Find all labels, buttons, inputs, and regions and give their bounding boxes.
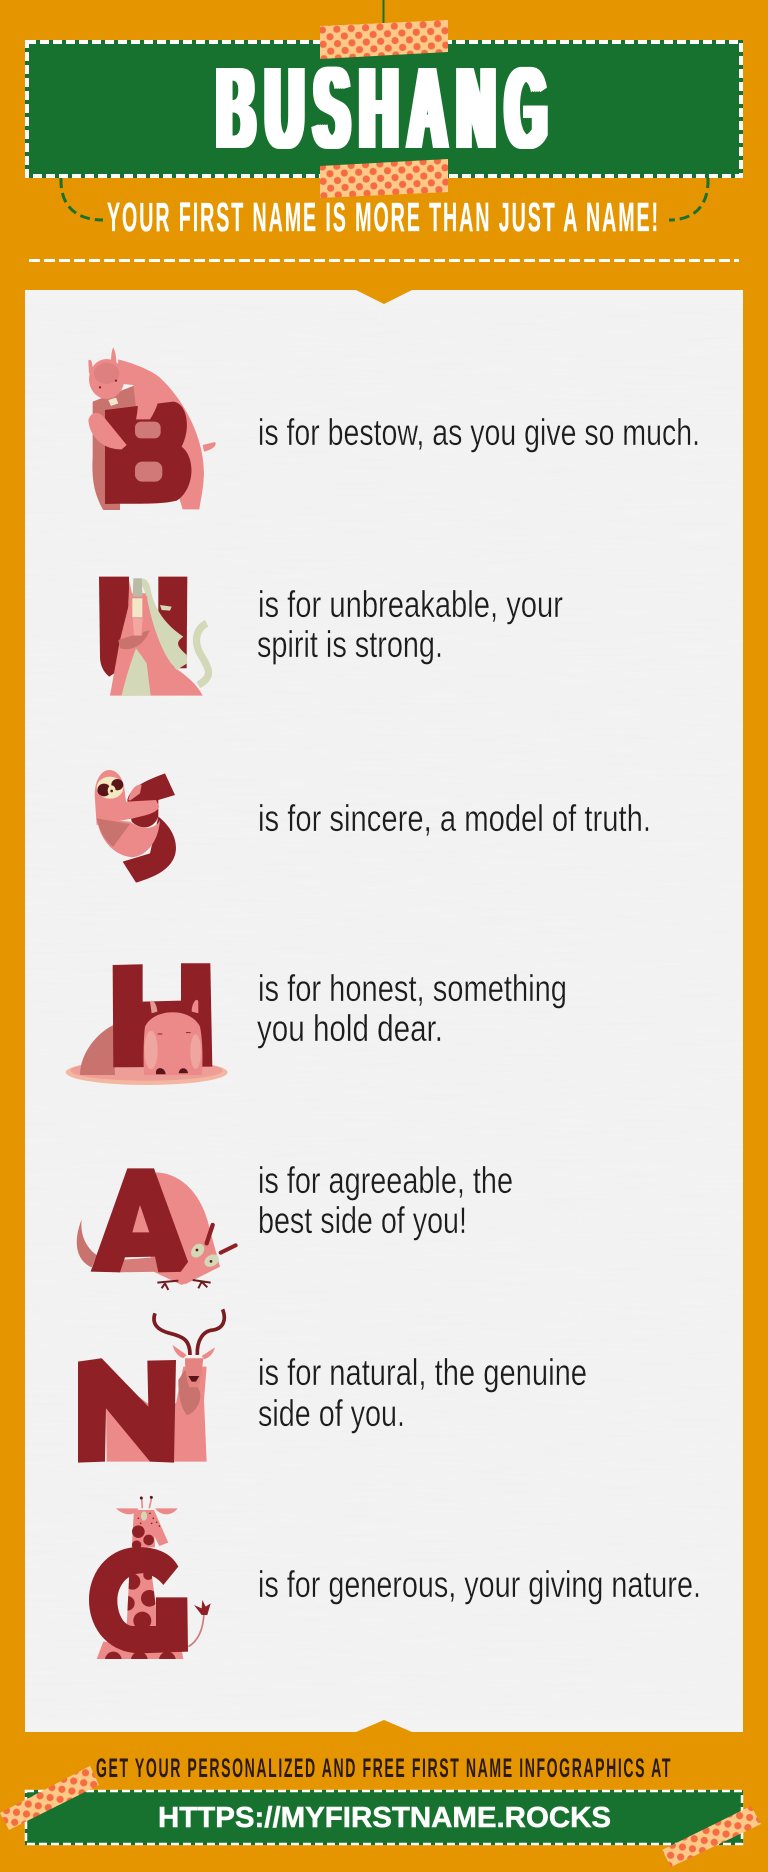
letter G illustration bbox=[89, 1496, 211, 1668]
title: BUSHANG bbox=[217, 43, 557, 173]
text: U: is for unbreakable, your bbox=[258, 584, 563, 625]
letter B illustration bbox=[88, 347, 216, 510]
text: A: is for agreeable, the bbox=[258, 1160, 513, 1201]
tape: footer right bbox=[662, 1806, 761, 1867]
hanging thread bbox=[382, 0, 384, 24]
tape: banner bottom bbox=[320, 159, 448, 198]
letter U illustration bbox=[99, 577, 209, 696]
tape: banner top bbox=[320, 20, 448, 59]
footer URL: HTTPS://MYFIRSTNAME.ROCKS bbox=[158, 1802, 611, 1834]
letter N illustration bbox=[78, 1309, 224, 1463]
text: U line 2: spirit is strong. bbox=[257, 624, 443, 665]
text: N: is for natural, the genuine bbox=[258, 1352, 587, 1393]
text: N line 2: side of you. bbox=[258, 1393, 405, 1434]
tape: footer left bbox=[0, 1766, 99, 1830]
divider bbox=[29, 259, 739, 262]
letter A illustration bbox=[77, 1168, 236, 1290]
text: H line 2: you hold dear. bbox=[257, 1008, 443, 1049]
subtitle connector left bbox=[61, 178, 103, 220]
panel: letters bbox=[25, 290, 743, 1732]
subtitle connector right bbox=[669, 178, 708, 220]
footer banner bbox=[25, 1790, 743, 1845]
letter H illustration bbox=[66, 963, 228, 1085]
letter S illustration bbox=[95, 770, 176, 883]
text: H: is for honest, something bbox=[258, 968, 567, 1009]
text: A line 2: best side of you! bbox=[258, 1200, 467, 1241]
title banner bbox=[25, 40, 743, 178]
text: S: is for sincere, a model of truth. bbox=[258, 798, 651, 839]
